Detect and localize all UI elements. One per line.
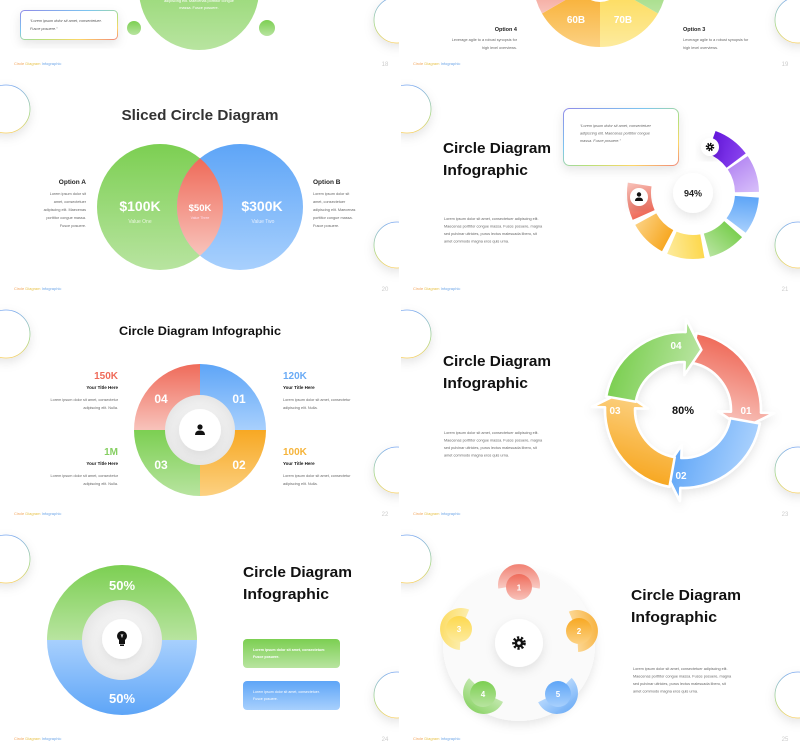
small green dots <box>127 21 141 35</box>
slide 20: sliced circle diagram: adipiscing elit. Maecenas <box>313 208 356 212</box>
slide 21: segment ring: 21 <box>782 287 789 293</box>
slide 25: petal cycle: 25 <box>782 737 789 743</box>
arrow labels: 03 <box>609 406 621 417</box>
center gear <box>495 619 543 667</box>
blue box: Fusce posuere. <box>253 697 278 701</box>
stat 100K <box>283 447 351 486</box>
stat 100K: 100K <box>283 447 308 458</box>
segment ring <box>618 131 768 264</box>
petals: 3 <box>457 625 462 634</box>
slide 22: quadrant donut: 22 <box>382 512 389 518</box>
petals <box>436 564 602 722</box>
petals: 1 <box>517 584 522 592</box>
slide 19 (partial): high level overviews. <box>683 46 718 50</box>
paragraph: Lorem ipsum dolor sit amet, consectetuer adipiscing elit. <box>633 667 728 671</box>
slide 20: sliced circle diagram: porttitor congue massa. <box>313 216 353 220</box>
stat 150K <box>50 371 119 410</box>
title: Circle Diagram <box>243 564 352 581</box>
arrow labels: 01 <box>740 406 752 417</box>
slide 20: sliced circle diagram <box>14 107 389 293</box>
stat 120K: Lorem ipsum dolor sit amet, consectetur <box>283 398 351 402</box>
slide 19 (partial): Leverage agile to a robust synopsis for <box>683 38 749 42</box>
slide 22: quadrant donut <box>14 324 389 518</box>
stat 120K: 120K <box>283 371 308 382</box>
green box: Lorem ipsum dolor sit amet, consectetuer. <box>253 648 325 652</box>
stat 150K: adipiscing elit. Nulla. <box>83 406 118 410</box>
slide 23: arrow cycle <box>413 303 790 518</box>
blue box <box>243 681 340 710</box>
footer: Circle Diagram Infographic <box>14 286 61 291</box>
stat 1M: adipiscing elit. Nulla. <box>83 482 118 486</box>
title: Circle Diagram <box>443 353 551 370</box>
donut <box>134 364 266 496</box>
stat 150K: Your Title Here <box>86 385 118 390</box>
pie chart: 70B <box>614 15 632 26</box>
paragraph: Lorem ipsum dolor sit amet, consectetuer adipiscing elit. <box>444 431 539 435</box>
donut: 50% <box>109 578 135 593</box>
arrow labels <box>609 341 752 482</box>
slide 24: half donut: Infographic <box>243 586 329 603</box>
paragraph <box>444 217 543 244</box>
option 3: Option 3 <box>683 27 705 33</box>
slide 20: sliced circle diagram: 20 <box>382 287 389 293</box>
quote box <box>564 108 678 166</box>
venn: $300K <box>241 198 283 214</box>
petals: 5 <box>556 690 561 699</box>
footer: Circle Diagram Infographic <box>413 736 460 741</box>
stat 120K: Your Title Here <box>283 385 315 390</box>
stat 1M <box>50 447 119 486</box>
paragraph: Maecenas porttitor congue massa. Fusce posuere, magna <box>444 438 543 442</box>
arrow labels: 04 <box>670 341 682 352</box>
slide 20: sliced circle diagram: Fusce posuere. <box>313 224 339 228</box>
footer: Circle Diagram Infographic <box>413 286 460 291</box>
paragraph: amet commodo magna eros quis urna. <box>444 240 509 244</box>
slide 21: segment ring: adipiscing elit. Maecenas porttitor congue <box>580 132 650 136</box>
slide 25: petal cycle: Infographic <box>631 609 717 626</box>
slide 20: sliced circle diagram: Lorem ipsum dolor sit <box>313 192 350 196</box>
slide 24: half donut <box>14 564 389 743</box>
donut: 02 <box>232 458 246 472</box>
slide 18 (partial): massa. Fusce posuere. <box>179 6 219 10</box>
donut: 04 <box>154 392 168 406</box>
slide 20: sliced circle diagram: amet, consectetuer <box>54 200 87 204</box>
paragraph: Maecenas porttitor congue massa. Fusce posuere, magna <box>633 674 732 678</box>
paragraph: sed pulvinar ultricies, purus lectus malesuada libero, sit <box>444 446 538 450</box>
slide 23: arrow cycle: 23 <box>782 512 789 518</box>
pie chart <box>533 0 667 47</box>
stat 150K: Lorem ipsum dolor sit amet, consectetur <box>50 398 119 402</box>
paragraph: amet commodo magna eros quis urna. <box>633 690 698 694</box>
footer: Circle Diagram Infographic <box>413 61 460 66</box>
stat 1M: 1M <box>104 447 118 458</box>
donut: 03 <box>154 458 168 472</box>
paragraph: sed pulvinar ultricies, purus lectus malesuada libero, sit <box>444 232 538 236</box>
option B: Option B <box>313 179 341 186</box>
center value <box>657 384 709 436</box>
slide 25: petal cycle <box>413 564 789 743</box>
donut <box>47 565 197 715</box>
blue box: Lorem ipsum dolor sit amet, consectetuer. <box>253 690 320 694</box>
slide 18 (partial): Fusce posuere.” <box>30 27 58 31</box>
segment ring: 94% <box>684 188 702 198</box>
donut: 50% <box>109 691 135 706</box>
slide 21: segment ring <box>413 108 789 293</box>
title: Circle Diagram Infographic <box>119 324 281 338</box>
green box: Fusce posuere. <box>253 655 279 659</box>
slide 20: sliced circle diagram: amet, consectetuer <box>313 200 346 204</box>
petals: 4 <box>481 690 486 699</box>
option A: Option A <box>59 179 86 186</box>
stat 1M: Lorem ipsum dolor sit amet, consectetur <box>50 474 119 478</box>
slide 18 (partial): “Lorem ipsum dolor sit amet, consectetuer. <box>30 19 102 23</box>
title: Circle Diagram <box>443 140 551 157</box>
slide 19 (partial) <box>413 0 789 68</box>
green box <box>243 639 340 668</box>
slide 19 (partial): Leverage agile to a robust synopsis for <box>452 38 518 42</box>
paragraph: sed pulvinar ultricies, purus lectus malesuada libero, sit <box>633 682 727 686</box>
stat 100K: Your Title Here <box>283 461 315 466</box>
icon: bulb <box>117 631 127 646</box>
paragraph: amet commodo magna eros quis urna. <box>444 454 509 458</box>
slide 19 (partial): high level overviews. <box>482 46 517 50</box>
slide 20: sliced circle diagram: adipiscing elit. Maecenas <box>44 208 86 212</box>
slide 21: segment ring: “Lorem ipsum dolor sit amet, consectetuer <box>580 124 652 128</box>
slide 18 (partial) <box>14 0 389 68</box>
pie chart: 60B <box>567 15 585 26</box>
stat 1M: Your Title Here <box>86 461 118 466</box>
stat 150K: 150K <box>94 371 119 382</box>
slide 21: segment ring: Infographic <box>443 162 528 179</box>
icon: gear <box>701 138 719 156</box>
big circle <box>443 569 595 721</box>
slide 18 (partial): 18 <box>382 62 389 68</box>
paragraph <box>633 667 732 694</box>
slide 24: half donut: 24 <box>382 737 389 743</box>
quote box <box>20 10 118 40</box>
decorative rings: left column <box>0 0 420 718</box>
paragraph: Lorem ipsum dolor sit amet, consectetuer adipiscing elit. <box>444 217 539 221</box>
title: Circle Diagram <box>631 587 741 604</box>
footer: Circle Diagram Infographic <box>14 736 61 741</box>
arrows <box>576 303 790 517</box>
slide 23: arrow cycle: Infographic <box>443 375 528 392</box>
stat 120K: adipiscing elit. Nulla. <box>283 406 318 410</box>
donut: 01 <box>232 392 246 406</box>
petals: 2 <box>577 627 582 636</box>
venn: Value Two <box>252 219 275 225</box>
footer: Circle Diagram Infographic <box>14 511 61 516</box>
venn: Value One <box>128 219 152 225</box>
slide 20: sliced circle diagram: Lorem ipsum dolor sit <box>50 192 87 196</box>
footer: Circle Diagram Infographic <box>413 511 460 516</box>
footer: Circle Diagram Infographic <box>14 61 61 66</box>
paragraph <box>444 431 543 458</box>
paragraph: Maecenas porttitor congue massa. Fusce posuere, magna <box>444 224 543 228</box>
title: Sliced Circle Diagram <box>122 107 278 124</box>
slide 21: segment ring: massa. Fusce posuere.” <box>580 139 621 143</box>
slide 20: sliced circle diagram: porttitor congue massa. <box>46 216 86 220</box>
center value: 80% <box>672 405 694 417</box>
green circle <box>139 0 259 50</box>
venn: Value Three <box>191 216 209 220</box>
stat 100K: Lorem ipsum dolor sit amet, consectetur <box>283 474 351 478</box>
venn: $50K <box>189 203 211 214</box>
stat 100K: adipiscing elit. Nulla. <box>283 482 318 486</box>
stat 120K <box>283 371 351 410</box>
venn: $100K <box>119 198 161 214</box>
option 4: Option 4 <box>495 27 518 33</box>
arrow labels: 02 <box>675 471 687 482</box>
slide 20: sliced circle diagram: Fusce posuere. <box>60 224 86 228</box>
slide 19 (partial): 19 <box>782 62 789 68</box>
venn <box>97 144 303 270</box>
icon: user <box>630 188 648 206</box>
decorative rings: right column <box>383 0 800 718</box>
